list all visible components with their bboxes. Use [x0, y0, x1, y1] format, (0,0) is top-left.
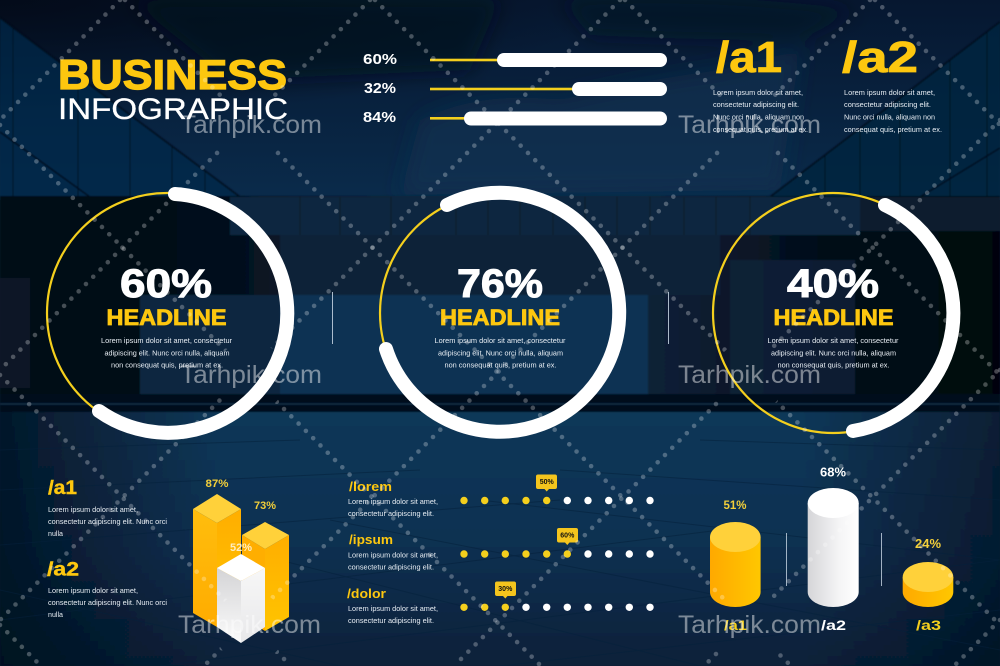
- ring panel: 76%: HEADLINE: [440, 305, 560, 330]
- watermark: site text: Tarhpik.com: [180, 111, 322, 139]
- text block: bottom /a1: /a1: [48, 478, 77, 499]
- text block: bottom /a2: nulla: [48, 610, 64, 619]
- text block: bottom /a2: /a2: [47, 560, 79, 580]
- ring panel: 76%: 76%: [457, 262, 543, 306]
- text block: top /a2: Nunc orci nulla, aliquam non: [844, 112, 935, 122]
- ring panel: 60%: adipiscing elit. Nunc orci nulla, aliquam: [104, 348, 230, 358]
- text block: top /a1: Lorem ipsum dolor sit amet,: [713, 88, 803, 97]
- title: INFOGRAPHIC: [58, 93, 288, 126]
- text block: bottom /a1: nulla: [48, 529, 64, 538]
- text block: top /a2: [842, 33, 942, 134]
- dot rating: lorem: [348, 474, 654, 518]
- dot rating: dolor: /dolor: [347, 586, 386, 601]
- bar: 87%: [193, 478, 241, 627]
- ring panel: 40%: non consequat quis, pretium at ex.: [778, 360, 890, 370]
- bar: 32%: 32%: [364, 81, 396, 97]
- cylinder: 24%: 24%: [915, 537, 941, 551]
- text block: bottom /a1: Lorem ipsum dolor sit amet,: [48, 505, 138, 514]
- text block: bottom /a2: Lorem ipsum dolor sit amet,: [48, 586, 138, 595]
- cylinder: 24%: [903, 537, 953, 633]
- dot rating: ipsum: 60%: [560, 532, 575, 540]
- cylinder: 68%: [808, 466, 859, 633]
- isometric bar chart: [193, 478, 289, 643]
- cylinder: 68%: 68%: [820, 466, 846, 480]
- dot rating: dolor: consectetur adipiscing elit.: [348, 616, 434, 625]
- text block: bottom /a2: [47, 560, 167, 619]
- text block: top /a1: consequat quis, pretium at ex.: [713, 125, 808, 134]
- text block: top /a1: /a1: [716, 33, 782, 82]
- watermark: site text: Tarhpik.com: [180, 361, 322, 389]
- title: BUSINESS: [58, 51, 287, 98]
- ring panel: 76%: adipiscing elit. Nunc orci nulla, aliquam: [438, 348, 563, 358]
- dot rating: dolor: 30%: [498, 586, 513, 593]
- cylinder: 68%: /a2: [821, 617, 846, 633]
- bar: 52%: 52%: [230, 542, 252, 554]
- dot rating: dolor: [347, 582, 654, 625]
- dot rating: dolor: Lorem ipsum dolor sit amet,: [348, 604, 438, 613]
- text block: bottom /a1: [48, 478, 167, 538]
- ring panel: 40%: [713, 193, 953, 433]
- bar: 60%: [363, 52, 667, 68]
- bar: 84%: [363, 110, 667, 126]
- ring panel: 40%: 40%: [787, 262, 879, 306]
- watermark: site text: Tarhpik.com: [178, 611, 321, 639]
- bar: 87%: 87%: [206, 478, 229, 490]
- watermark: site text: Tarhpik.com: [678, 111, 821, 139]
- bar: 52%: [217, 542, 265, 643]
- text block: top /a2: consequat quis, pretium at ex.: [844, 125, 942, 134]
- cylinder: 24%: /a3: [916, 617, 941, 633]
- dot rating: ipsum: [348, 528, 654, 572]
- dot rating: lorem: Lorem ipsum dolor sit amet,: [348, 497, 438, 506]
- bar: 73%: 73%: [254, 500, 276, 512]
- watermark: site text: [178, 111, 821, 639]
- bar: 32%: [364, 81, 667, 97]
- dot rating: lorem: 50%: [540, 479, 554, 486]
- horizontal progress bars: [363, 52, 667, 126]
- ring panel: 76%: [380, 193, 620, 433]
- watermark: site text: Tarhpik.com: [678, 611, 821, 639]
- text block: top /a2: /a2: [842, 33, 918, 82]
- ring panel: 60%: [47, 193, 287, 433]
- dot rating: ipsum: Lorem ipsum dolor sit amet,: [348, 550, 438, 560]
- text block: bottom /a1: consectetur adipiscing elit. Nunc orci: [48, 517, 167, 526]
- ring panel: 60%: Lorem ipsum dolor sit amet, consectetur: [101, 336, 232, 345]
- title: [58, 51, 288, 126]
- cylinder chart: [710, 466, 953, 633]
- watermark: site text: Tarhpik.com: [678, 361, 821, 389]
- ring panel: 60%: non consequat quis, pretium at ex.: [111, 360, 223, 370]
- bar: 73%: [242, 500, 289, 631]
- dot rating: lorem: consectetur adipiscing elit.: [348, 509, 434, 518]
- cylinder: 51%: /a1: [724, 617, 747, 633]
- dot rating: ipsum: consectetur adipiscing elit.: [348, 562, 434, 572]
- cylinder: 51%: [710, 498, 761, 633]
- ring panel: 40%: Lorem ipsum dolor sit amet, consectetur: [768, 336, 899, 345]
- dot rating: lorem: /lorem: [349, 479, 392, 494]
- ring panel: 40%: adipiscing elit. Nunc orci nulla, aliquam: [771, 348, 896, 358]
- text block: bottom /a2: consectetur adipiscing elit. Nunc orci: [48, 598, 167, 607]
- cylinder: 51%: 51%: [724, 498, 747, 512]
- dot rating: ipsum: /ipsum: [349, 532, 393, 547]
- text block: top /a1: consectetur adipiscing elit.: [713, 100, 799, 109]
- ring panel: 60%: HEADLINE: [106, 305, 226, 330]
- ring panel: 76%: Lorem ipsum dolor sit amet, consectetur: [434, 336, 566, 345]
- ring panel: 60%: 60%: [120, 262, 212, 306]
- ring panel: 76%: non consequat quis, pretium at ex.: [444, 360, 556, 370]
- text block: top /a1: Nunc orci nulla, aliquam non: [713, 112, 804, 122]
- ring panel: 40%: HEADLINE: [774, 305, 894, 330]
- bar: 60%: 60%: [363, 52, 397, 68]
- text block: top /a2: consectetur adipiscing elit.: [844, 100, 931, 109]
- text block: top /a2: Lorem ipsum dolor sit amet,: [844, 88, 935, 97]
- text block: top /a1: [713, 33, 808, 134]
- bar: 84%: 84%: [363, 110, 396, 126]
